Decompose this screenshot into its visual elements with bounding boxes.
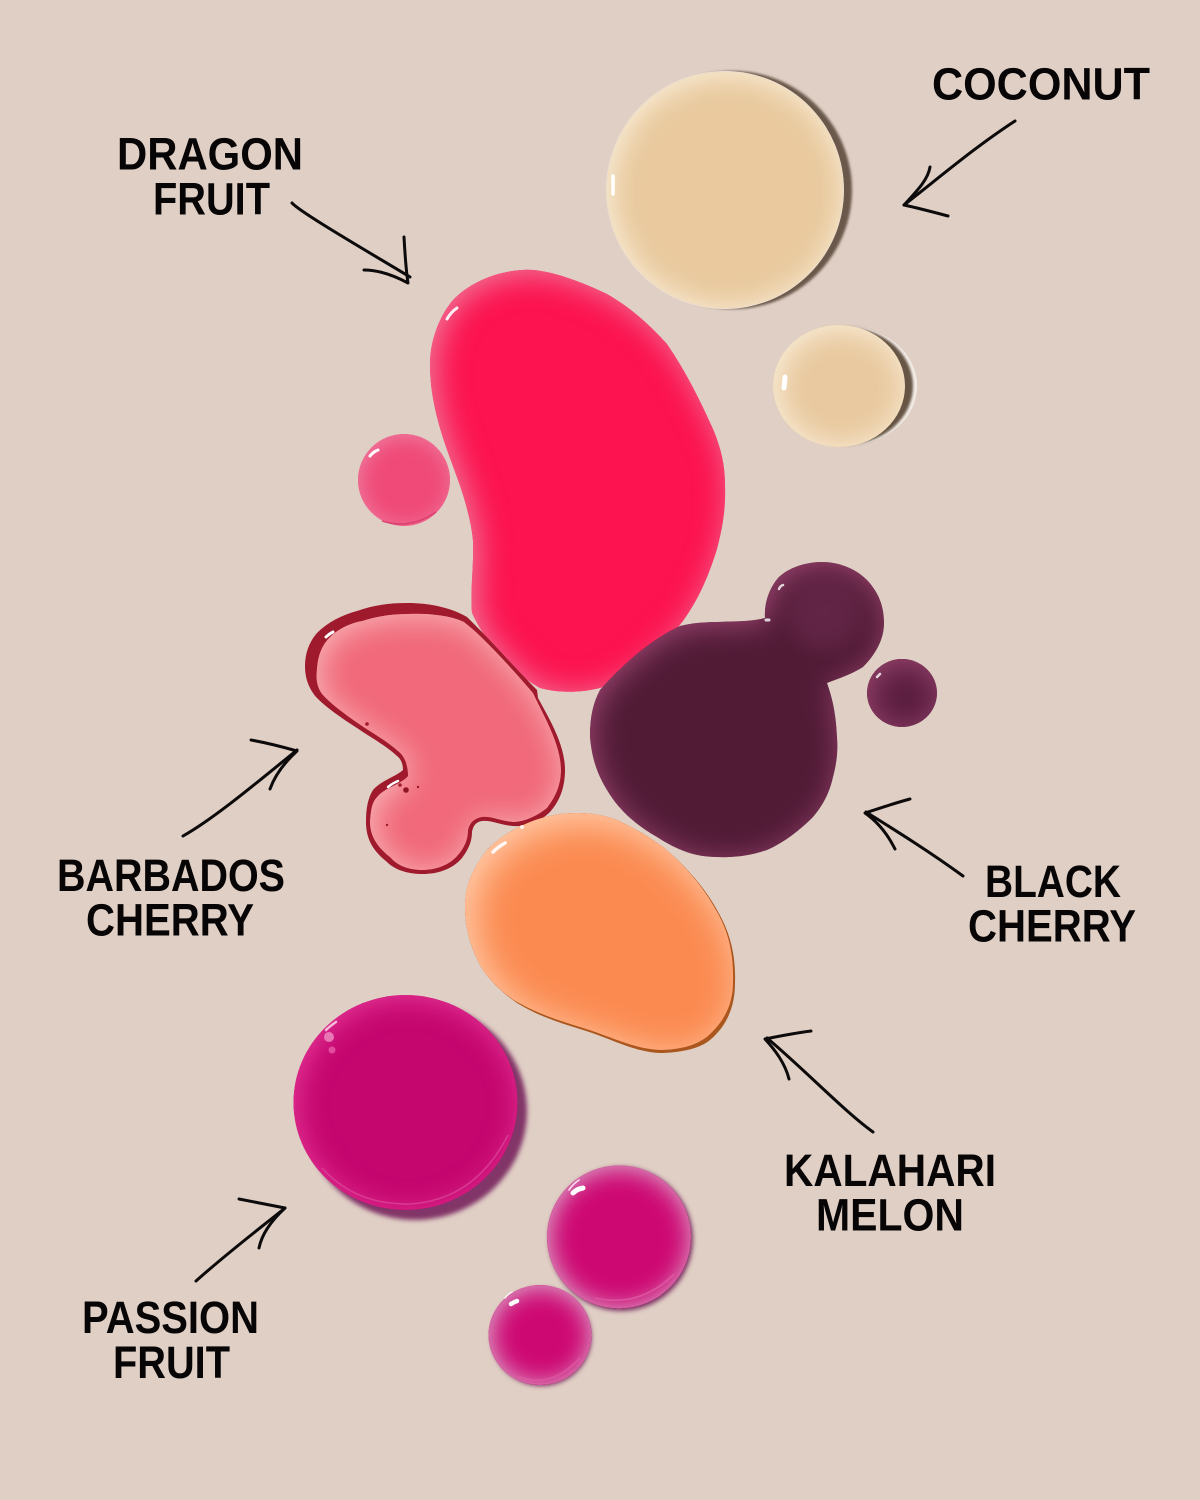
blob: small pink drop — [358, 434, 450, 526]
blob: passion fruit small — [488, 1285, 592, 1386]
label: kalahari melon: KALAHARI — [784, 1145, 996, 1196]
arrow: barbados cherry — [183, 740, 297, 836]
label: kalahari melon: MELON — [816, 1190, 964, 1240]
blob: black cherry — [590, 562, 884, 857]
arrow: dragon fruit — [292, 203, 410, 283]
label: dragon fruit — [117, 128, 303, 224]
label: dragon fruit: DRAGON — [117, 128, 303, 180]
arrow: coconut — [904, 121, 1015, 216]
blob: passion fruit medium — [547, 1166, 693, 1311]
label: passion fruit: FRUIT — [113, 1337, 230, 1388]
arrow: passion fruit — [196, 1199, 285, 1281]
blob: dragon fruit — [430, 270, 725, 692]
blob: kalahari melon — [465, 813, 735, 1053]
label: black cherry: BLACK — [985, 856, 1121, 907]
arrow: black cherry — [865, 799, 963, 876]
label: dragon fruit: FRUIT — [153, 174, 270, 224]
label: barbados cherry: BARBADOS — [57, 850, 285, 901]
label: coconut: COCONUT — [932, 58, 1150, 110]
label: barbados cherry — [57, 850, 285, 946]
blob: small black cherry drop — [867, 659, 937, 727]
blob: passion fruit large — [294, 995, 527, 1220]
label: black cherry: CHERRY — [968, 900, 1136, 952]
blob: coconut small — [773, 325, 917, 447]
label: kalahari melon — [784, 1145, 996, 1240]
arrow: kalahari melon — [765, 1031, 873, 1132]
label: barbados cherry: CHERRY — [86, 894, 254, 946]
label: passion fruit: PASSION — [82, 1292, 259, 1343]
blob: barbados cherry — [305, 603, 565, 874]
label: black cherry — [968, 856, 1136, 952]
blob: coconut large — [606, 71, 852, 309]
label: passion fruit — [82, 1292, 259, 1388]
